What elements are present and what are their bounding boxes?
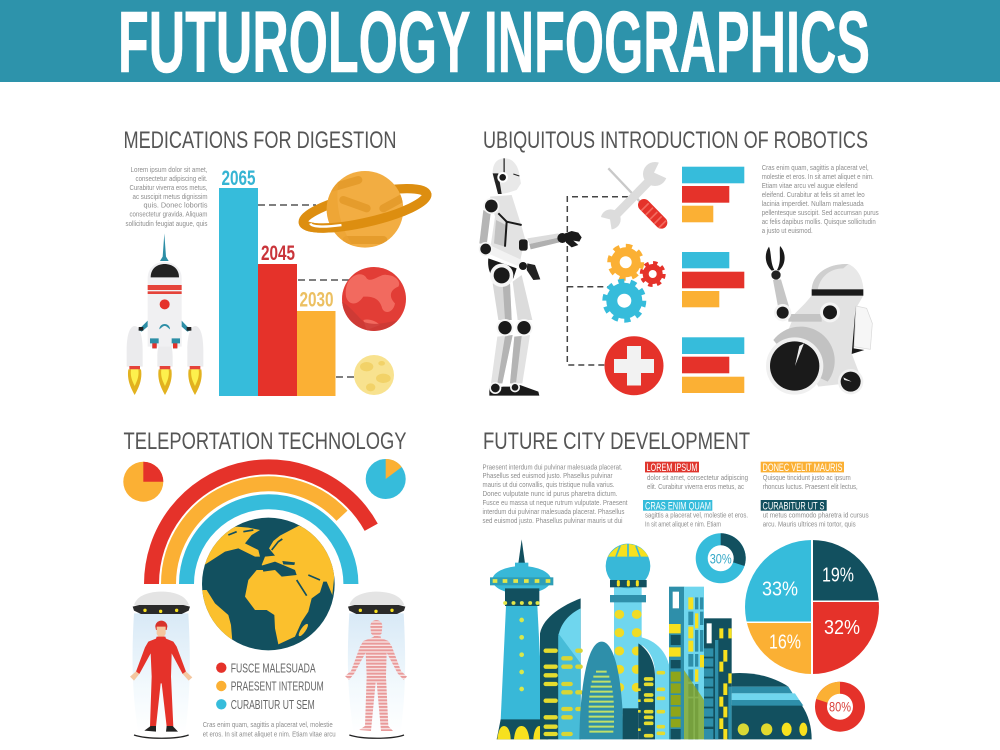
text block: robotics: pellentesque suscipit. Sed accumsan purus xyxy=(762,208,879,217)
building: curved tower xyxy=(540,598,581,739)
icon: wheeled robot xyxy=(766,246,872,395)
legend: teleportation: CURABITUR UT SEM xyxy=(231,698,315,712)
pie chart: city shares: 32% xyxy=(824,617,860,639)
header banner xyxy=(0,0,1000,91)
callout: donec velit mauris: rhoncus luctus. Praesent elit lectus, xyxy=(763,482,858,491)
icon: ringed planet xyxy=(300,170,430,250)
text block: medications intro: sollicitudin feugiat augue, quis xyxy=(126,219,208,228)
callout: curabitur ut s: CURABITUR UT S xyxy=(762,500,824,512)
icon: globe xyxy=(195,518,342,650)
bar chart: years: 2045 xyxy=(261,242,295,265)
text block: robotics: molestie et eros. In sit amet aliquet e nim. xyxy=(762,172,874,181)
callout: curabitur ut s: arcu. Mauris ultrices mi tortor, quis xyxy=(763,520,856,528)
pie chart: small blue xyxy=(366,459,406,499)
heading: medications: MEDICATIONS FOR DIGESTION xyxy=(124,127,396,154)
building: dark tower xyxy=(704,618,732,739)
building: dome tower xyxy=(606,544,650,714)
text block: medications intro: Lorem ipsum dolor sit amet, xyxy=(130,165,208,174)
callout: cras enim quam xyxy=(643,500,748,528)
callout: cras enim quam: sagittis a placerat vel, molestie et eros. xyxy=(645,510,748,520)
legend: teleportation xyxy=(216,661,324,712)
donut chart: 30 percent: 30% xyxy=(710,550,732,566)
text block: city intro: sed euismod justo. Phasellus pulvinar mauris ut dui xyxy=(482,516,623,525)
pie chart: small orange xyxy=(123,462,163,502)
callout: donec velit mauris xyxy=(761,462,858,491)
callout: donec velit mauris: Quisque tincidunt justo ac ipsum xyxy=(763,473,851,482)
text block: medications intro: ac suscipit metus dignissim xyxy=(132,192,208,201)
icon: gears xyxy=(606,247,663,319)
building: glass tower xyxy=(669,587,704,739)
arc chart xyxy=(152,467,371,584)
pie chart: city shares xyxy=(745,540,880,675)
figure: striped person xyxy=(345,620,407,731)
text block: city intro xyxy=(482,462,628,525)
text block: teleportation: et eros. In sit amet aliquet e nim. Etiam vitae arcu xyxy=(203,730,336,738)
callout: cras enim quam: CRAS ENIM QUAM xyxy=(645,500,711,512)
connector dashes: planets xyxy=(258,205,356,377)
text block: robotics: ac felis dapibus mollis. Quisque sollicitudin xyxy=(762,217,876,226)
heading: teleportation: TELEPORTATION TECHNOLOGY xyxy=(124,428,406,455)
text block: medications intro xyxy=(126,165,208,228)
panel: teleportation technology xyxy=(123,428,407,738)
callout: donec velit mauris: DONEC VELIT MAURIS xyxy=(762,462,842,474)
text block: robotics: lacinia imperdiet. Nullam malesuada xyxy=(762,199,864,208)
legend: teleportation: FUSCE MALESUADA xyxy=(231,661,316,675)
heading: robotics: UBIQUITOUS INTRODUCTION OF ROBOTICS xyxy=(483,127,868,154)
illustration: futuristic city xyxy=(490,539,812,739)
building: layered dome xyxy=(732,673,812,739)
callout: lorem ipsum: LOREM IPSUM xyxy=(646,462,698,474)
icon: wrench and screwdriver xyxy=(599,162,670,232)
building: needle tower xyxy=(490,539,553,739)
pie chart: city shares: 19% xyxy=(822,564,854,586)
donut chart: 30 percent xyxy=(696,533,746,583)
text block: city intro: Phasellus sed euismod justo. Phasellus pulvinar xyxy=(482,471,613,480)
pie chart: city shares: 16% xyxy=(769,632,801,654)
text block: city intro: Praesent interdum dui pulvinar malesuada placerat. xyxy=(482,462,622,472)
callout: curabitur ut s: ut metus commodo pharetra id cursus xyxy=(763,510,869,520)
callout: lorem ipsum: elit. Curabitur viverra eros metus, ac xyxy=(647,482,744,491)
text block: city intro: mauris ut dui convallis, quis tristique nulla varius. xyxy=(482,480,614,489)
pie chart: city shares: 33% xyxy=(762,578,798,600)
legend: teleportation: PRAESENT INTERDUM xyxy=(231,680,324,694)
text block: medications intro: consectetur gravida. Aliquam xyxy=(130,210,208,218)
donut chart: 80 percent xyxy=(815,682,865,732)
icon: right teleport pod xyxy=(345,592,407,738)
icon: medical cross xyxy=(604,336,664,395)
text block: robotics: Etiam vitae arcu vel augue eleifend xyxy=(762,181,858,190)
callout: lorem ipsum: dolor sit amet, consectetur adipiscing xyxy=(647,473,748,482)
callout: curabitur ut s xyxy=(761,500,869,528)
text block: robotics xyxy=(762,163,879,235)
text block: teleportation xyxy=(203,720,336,738)
text block: robotics: eleifend. Curabitur at felis sit amet leo xyxy=(762,190,865,199)
bar chart: years xyxy=(219,167,336,396)
panel: robotics xyxy=(479,127,879,396)
connector dashes: robot to tools xyxy=(567,197,628,365)
bar chart: years: 2030 xyxy=(300,288,334,312)
bar group: tools xyxy=(682,167,744,222)
text block: city intro: Fusce eu massa ut neque rutrum vulputate. Praesent xyxy=(482,498,628,507)
text block: robotics: a justo ut euismod. xyxy=(762,226,813,235)
icon: moon xyxy=(354,355,394,395)
building: low block and curved block xyxy=(623,637,671,739)
callout: lorem ipsum xyxy=(645,462,748,491)
icon: red planet xyxy=(342,267,406,337)
text block: medications intro: quis. Donec lobortis xyxy=(144,200,208,210)
callout: cras enim quam: In sit amet aliquet e nim. Etiam xyxy=(645,520,721,528)
panel: future city development xyxy=(482,428,880,739)
donut chart: 80 percent: 80% xyxy=(829,699,851,715)
bar chart: years: 2065 xyxy=(222,167,256,190)
text block: robotics: Cras enim quam, sagittis a placerat vel, xyxy=(762,163,869,172)
figure: red suit person xyxy=(130,621,192,732)
panel: medications for digestion xyxy=(124,127,430,396)
text block: medications intro: consectetur adipiscing elit. xyxy=(136,174,208,183)
bar group: gears xyxy=(682,252,744,307)
heading: future city: FUTURE CITY DEVELOPMENT xyxy=(483,428,750,455)
icon: left teleport pod xyxy=(130,592,192,738)
text block: teleportation: Cras enim quam, sagittis a placerat vel, molestie xyxy=(203,720,333,729)
building: gherkin xyxy=(579,642,623,739)
text block: city intro: Donec vulputate nunc id purus pharetra dictum. xyxy=(482,489,618,498)
icon: rocket xyxy=(127,233,203,395)
text block: medications intro: Curabitur viverra eros metus, xyxy=(130,183,208,192)
icon: humanoid robot xyxy=(479,158,582,396)
text block: city intro: interdum dui pulvinar malesuada placerat. Phasellus xyxy=(482,507,625,516)
bar group: medical xyxy=(682,337,744,393)
